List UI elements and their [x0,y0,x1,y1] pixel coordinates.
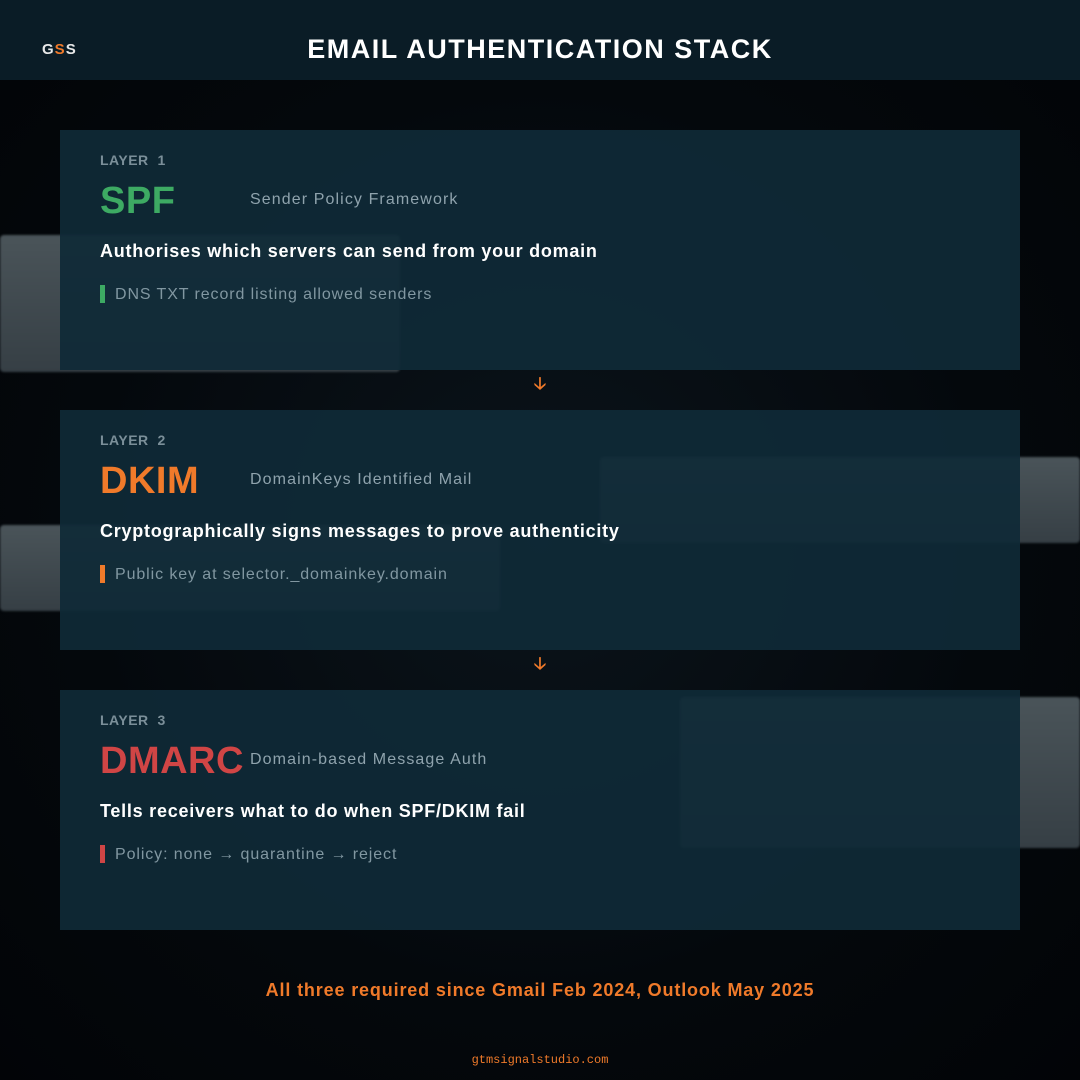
panel: DMARC: DMARC [100,740,244,782]
panel: SPF: LAYER 1 [100,152,166,168]
logo: GSS [42,41,77,58]
url: gtmsignalstudio.com [472,1053,608,1067]
panel: DKIM: Cryptographically signs messages to prove authenticity [100,521,620,541]
panel: DMARC [60,690,1020,930]
panel: DMARC: LAYER 3 [100,712,166,728]
panel: SPF: Authorises which servers can send from your domain [100,241,598,261]
panel: DKIM: Public key at selector._domainkey.domain [115,566,448,583]
panel: DKIM: DomainKeys Identified Mail [250,471,472,488]
panel: SPF: SPF [100,180,175,222]
title: EMAIL AUTHENTICATION STACK [307,34,773,64]
panel: SPF: Sender Policy Framework [250,191,458,208]
panel: SPF [60,130,1020,370]
panel: DKIM: LAYER 2 [100,432,166,448]
header [0,0,1080,80]
arrow: 🡣 [534,654,546,673]
footer note: All three required since Gmail Feb 2024, Outlook May 2025 [266,980,814,1000]
panel: DKIM [60,410,1020,650]
panel: DKIM: DKIM [100,460,199,502]
panel: SPF: DNS TXT record listing allowed senders [115,286,432,303]
arrow: 🡣 [534,374,546,393]
panel: DMARC: Domain-based Message Auth [250,751,487,768]
panel: DMARC: Tells receivers what to do when SPF/DKIM fail [100,801,526,821]
panel: DMARC: Policy: none → quarantine → reject [115,846,397,863]
